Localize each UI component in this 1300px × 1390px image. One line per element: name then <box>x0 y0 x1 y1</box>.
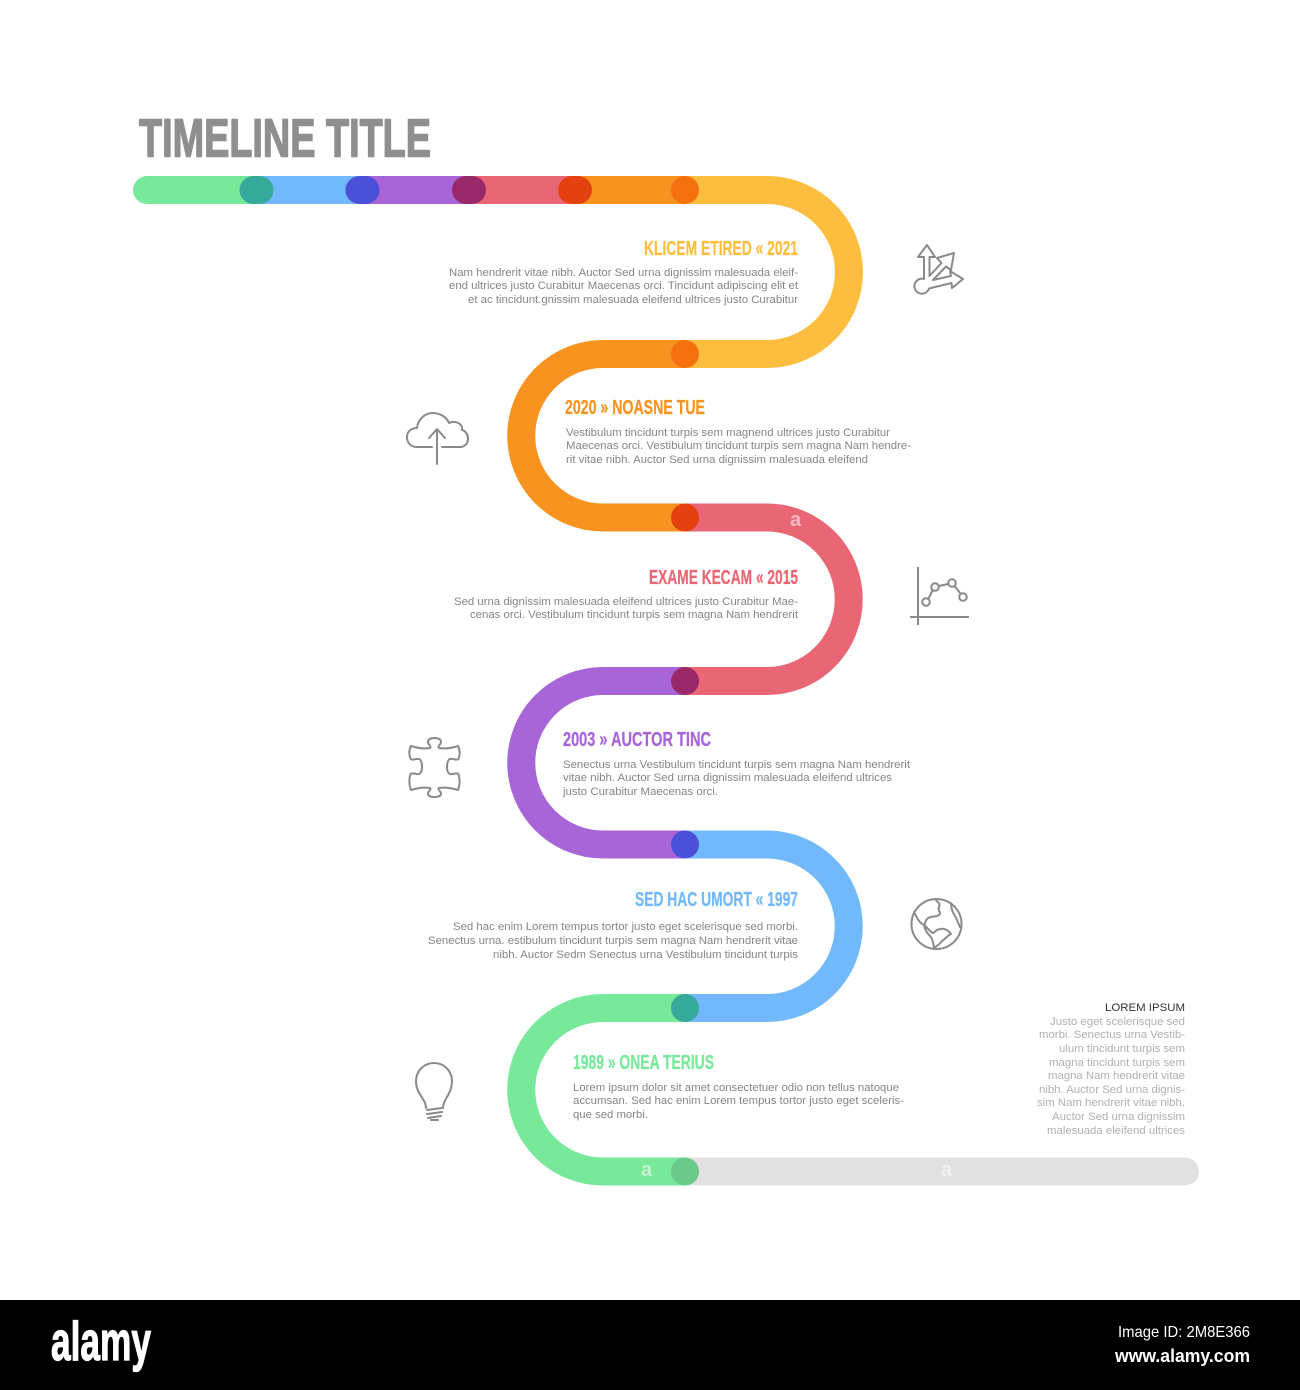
text: a <box>790 509 802 531</box>
timeline markers on top bar <box>240 176 699 204</box>
footer url: www.alamy.com <box>1114 1346 1250 1366</box>
body: 2003: justo Curabitur Maecenas orci. <box>562 786 718 798</box>
body: 1989: accumsan. Sed hac enim Lorem tempus tortor justo eget sceleris- <box>573 1095 904 1107</box>
title: TIMELINE TITLE <box>139 108 431 168</box>
heading: 2003: 2003 » AUCTOR TINC <box>563 728 711 751</box>
image id: Image ID: 2M8E366 <box>1118 1324 1250 1341</box>
icon: globe <box>912 899 962 949</box>
road segment: 1989 green <box>147 190 685 1172</box>
side note body: ulum tincidunt turpis sem <box>1059 1043 1185 1055</box>
timeline markers on curve <box>671 340 699 1186</box>
icon: diverging arrows <box>914 245 963 294</box>
side note <box>1037 1002 1185 1137</box>
heading: 1997: SED HAC UMORT « 1997 <box>635 888 798 911</box>
road segment: 2003 purple <box>362 190 685 844</box>
entry: 2020 <box>565 396 911 466</box>
body: 1997: nibh. Auctor Sedm Senectus urna Vestibulum tincidunt turpis <box>493 949 798 961</box>
body: 2015: cenas orci. Vestibulum tincidunt turpis sem magna Nam hendrerit <box>470 609 799 621</box>
body: 2021: Nam hendrerit vitae nibh. Auctor Sed urna dignissim malesuada eleif- <box>449 267 798 279</box>
body: 1997: Senectus urna. estibulum tincidunt turpis sem magna Nam hendrerit vitae <box>428 935 798 947</box>
road segment: 1997 blue <box>256 190 849 1008</box>
body: 2020: rit vitae nibh. Auctor Sed urna dignissim malesuada eleifend <box>566 454 868 466</box>
body: 2021 <box>449 267 799 306</box>
side note body: sim Nam hendrerit vitae nibh. <box>1037 1097 1185 1109</box>
side note heading: LOREM IPSUM <box>1105 1002 1185 1014</box>
body: 1989: Lorem ipsum dolor sit amet consectetuer odio non tellus natoque <box>573 1082 899 1094</box>
body: 2003: Senectus urna Vestibulum tincidunt turpis sem magna Nam hendrerit <box>563 759 911 771</box>
road segment: 2020 orange <box>521 190 685 518</box>
road segment: 2015 pink <box>469 190 849 681</box>
heading: 1989: 1989 » ONEA TERIUS <box>573 1051 714 1074</box>
body: 2015 <box>454 596 799 621</box>
body: 2015: Sed urna dignissim malesuada eleifend ultrices justo Curabitur Mae- <box>454 596 798 608</box>
entry: 2021 <box>449 237 799 306</box>
heading: 2015: EXAME KECAM « 2015 <box>649 566 798 589</box>
icon: cloud upload <box>407 413 468 464</box>
side note body: morbi. Senectus urna Vestib- <box>1039 1029 1185 1041</box>
entry: 1997 <box>428 888 798 961</box>
body: 2021: et ac tincidunt.gnissim malesuada eleifend ultrices justo Curabitur <box>468 294 798 306</box>
winding timeline road <box>147 190 1185 1172</box>
side note body: Justo eget scelerisque sed <box>1050 1016 1185 1028</box>
body: 2020 <box>566 427 911 466</box>
side note body: malesuada eleifend ultrices <box>1047 1125 1185 1137</box>
body: 2003 <box>562 759 911 798</box>
entry: 1989 <box>573 1051 904 1121</box>
text: a <box>641 1159 653 1181</box>
road segment: 2021 yellow <box>685 190 849 354</box>
body: 1997 <box>428 921 798 961</box>
entry: 2015 <box>454 566 799 621</box>
side note body: Auctor Sed urna dignissim <box>1052 1111 1185 1123</box>
heading: 2021: KLICEM ETIRED « 2021 <box>644 237 798 260</box>
side note body: magna tincidunt turpis sem <box>1049 1057 1185 1069</box>
footer band <box>0 1300 1300 1390</box>
side note body: nibh. Auctor Sed urna dignis- <box>1039 1084 1185 1096</box>
body: 2020: Vestibulum tincidunt turpis sem magnend ultrices justo Curabitur <box>566 427 890 439</box>
entry: 2003 <box>562 728 911 798</box>
heading: 2020: 2020 » NOASNE TUE <box>565 396 705 419</box>
icon: light bulb <box>416 1063 452 1120</box>
body: 2020: Maecenas orci. Vestibulum tincidunt turpis sem magna Nam hendre- <box>566 440 911 452</box>
body: 2021: end ultrices justo Curabitur Maecenas orci. Tincidunt adipiscing elit et <box>449 280 799 292</box>
footer logo: alamy <box>51 1310 151 1372</box>
body: 1989: que sed morbi. <box>573 1109 648 1121</box>
body: 2003: vitae nibh. Auctor Sed urna dignissim malesuada eleifend ultrices <box>563 772 892 784</box>
body: 1997: Sed hac enim Lorem tempus tortor justo eget scelerisque sed morbi. <box>453 921 798 933</box>
side note body <box>1037 1016 1185 1137</box>
icon: puzzle piece <box>409 738 460 797</box>
body: 1989 <box>573 1082 904 1121</box>
icon: line chart <box>910 567 969 625</box>
side note body: magna Nam hendrerit vitae <box>1048 1070 1185 1082</box>
road segment: gray end <box>685 1158 1185 1186</box>
text: a <box>941 1159 953 1181</box>
